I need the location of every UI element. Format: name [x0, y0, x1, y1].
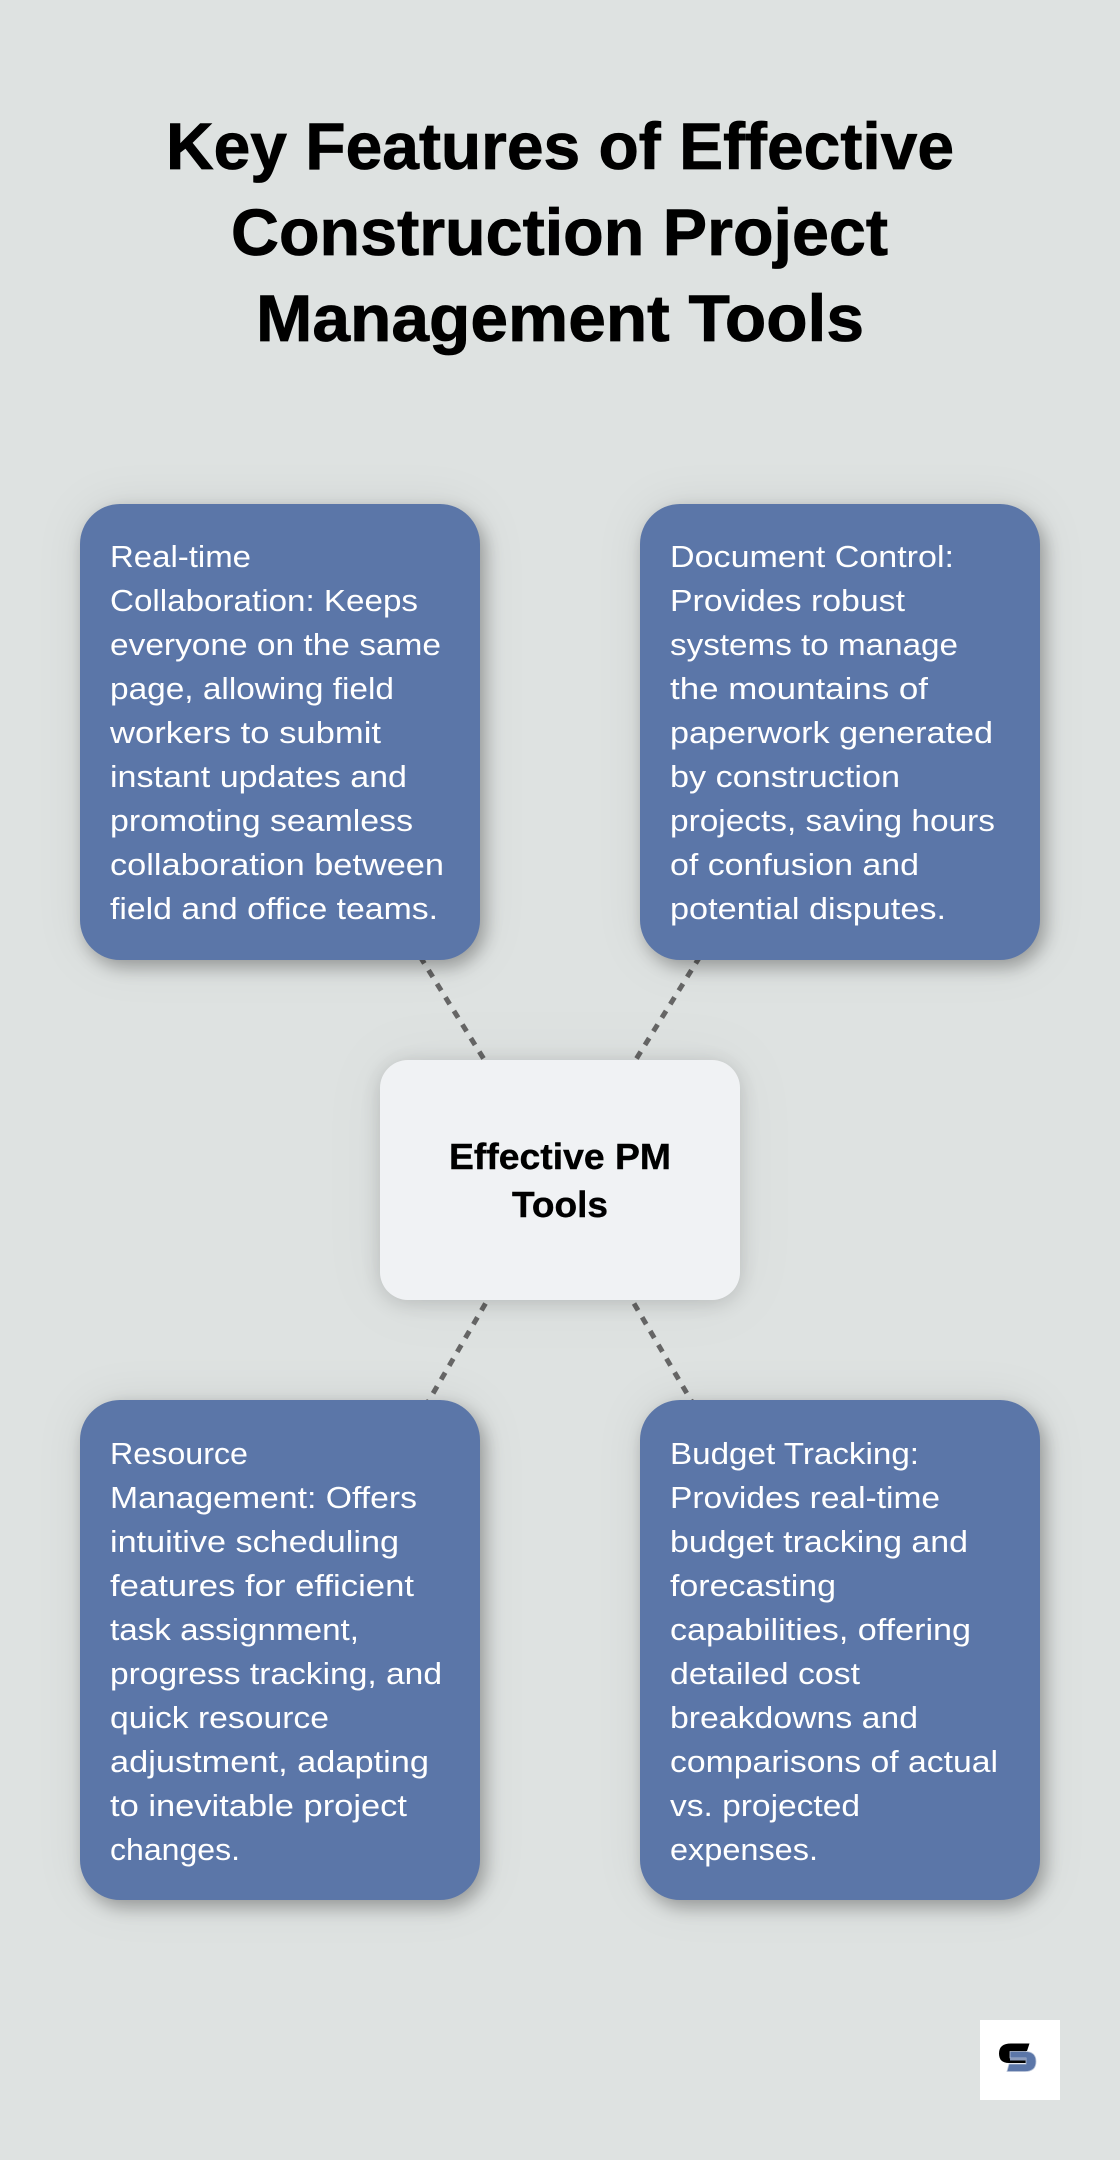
panel: real-time collaboration: everyone on the same — [110, 628, 441, 662]
panel: resource management: task assignment, — [110, 1613, 359, 1647]
panel: document control — [640, 504, 1040, 960]
panel: budget tracking: forecasting — [670, 1569, 836, 1603]
panel: resource management: adjustment, adapting — [110, 1745, 429, 1779]
panel: document control: of confusion and — [670, 848, 919, 882]
title — [166, 109, 954, 355]
panel: resource management: changes. — [110, 1833, 240, 1867]
panel: budget tracking: Provides real-time — [670, 1481, 940, 1515]
panel: centre node: Tools — [512, 1184, 608, 1225]
panel: budget tracking: vs. projected — [670, 1789, 860, 1823]
panel: budget tracking: budget tracking and — [670, 1525, 968, 1559]
panel: resource management: progress tracking, and — [110, 1657, 442, 1691]
connector: centre to real-time collaboration — [421, 958, 484, 1058]
panel: resource management: intuitive scheduling — [110, 1525, 399, 1559]
panel: document control: Document Control: — [670, 540, 954, 574]
connector: centre to document control — [636, 958, 699, 1058]
panel: real-time collaboration — [80, 504, 480, 960]
panel: document control: projects, saving hours — [670, 804, 995, 838]
panel: real-time collaboration: Collaboration: Keeps — [110, 584, 418, 618]
panel: document control: the mountains of — [670, 672, 929, 706]
panel: centre node — [380, 1060, 740, 1300]
panel: budget tracking: breakdowns and — [670, 1701, 918, 1735]
panel: budget tracking — [640, 1400, 1040, 1900]
title: Construction Project — [231, 195, 888, 269]
panel: document control: potential disputes. — [670, 892, 946, 926]
title: Key Features of Effective — [166, 109, 954, 183]
panel: document control: Provides robust — [670, 584, 906, 618]
panel: document control: by construction — [670, 760, 900, 794]
panel: resource management: Management: Offers — [110, 1481, 417, 1515]
panel: resource management: features for efficient — [110, 1569, 415, 1603]
title: Management Tools — [256, 281, 864, 355]
panel: document control: systems to manage — [670, 628, 958, 662]
panel: resource management: to inevitable project — [110, 1789, 408, 1823]
panel: resource management — [80, 1400, 480, 1900]
panel: budget tracking: capabilities, offering — [670, 1613, 971, 1647]
panel: real-time collaboration: page, allowing field — [110, 672, 394, 706]
panel: budget tracking: expenses. — [670, 1833, 818, 1867]
panel: centre node: Effective PM — [449, 1136, 671, 1177]
panel: real-time collaboration: promoting seamless — [110, 804, 413, 838]
panel: resource management: Resource — [110, 1437, 248, 1471]
panel: real-time collaboration: instant updates and — [110, 760, 407, 794]
panel: resource management: quick resource — [110, 1701, 329, 1735]
panel: real-time collaboration: workers to submit — [109, 716, 382, 750]
panel: budget tracking: comparisons of actual — [670, 1745, 998, 1779]
panel: real-time collaboration: field and office teams. — [110, 892, 438, 926]
panel: real-time collaboration: collaboration between — [110, 848, 444, 882]
connector: centre to budget tracking — [634, 1304, 692, 1402]
connector: centre to resource management — [428, 1304, 486, 1402]
panel: real-time collaboration: Real-time — [110, 540, 251, 574]
icon: logo — [980, 2020, 1060, 2100]
panel: budget tracking: detailed cost — [670, 1657, 861, 1691]
panel: budget tracking: Budget Tracking: — [670, 1437, 919, 1471]
panel: document control: paperwork generated — [670, 716, 993, 750]
